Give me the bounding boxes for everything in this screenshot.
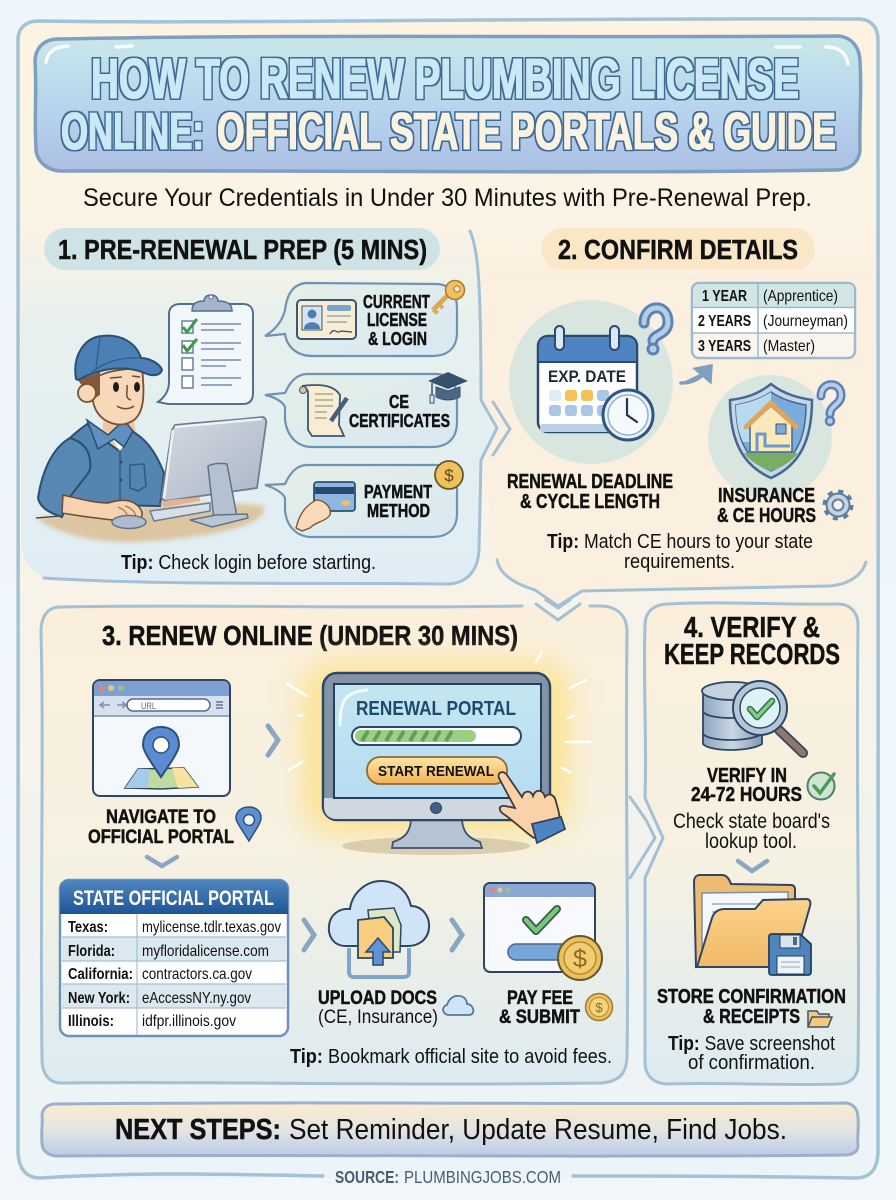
table row 2: 2 YEARS — [698, 313, 751, 330]
illustration: plumber at computer — [36, 336, 266, 542]
label: pay fee and submit — [499, 987, 580, 1028]
table row 1 — [702, 288, 838, 305]
icon: shield with house — [708, 375, 832, 499]
source line — [335, 1167, 561, 1187]
label: pay fee and submit: & SUBMIT — [499, 1006, 580, 1028]
icon: browser with check and coin: $ — [573, 945, 587, 973]
table row 1: 1 YEAR — [702, 288, 747, 305]
row: Florida — [68, 943, 269, 960]
row: Florida: Florida: — [68, 943, 115, 960]
label: verify in 24-72 hours: 24-72 HOURS — [691, 783, 802, 806]
icon: small map pin — [236, 807, 261, 841]
bubble text 1 — [363, 292, 430, 349]
tip 4 — [668, 1032, 835, 1074]
label: verify in 24-72 hours — [691, 764, 802, 806]
label: upload docs — [318, 987, 438, 1028]
chevron right — [452, 920, 462, 950]
tip 2: requirements. — [624, 550, 735, 573]
next steps list: Set Reminder, Update Resume, Find Jobs. — [289, 1114, 787, 1146]
label: store confirmation: STORE CONFIRMATION — [657, 986, 846, 1008]
icon: check badge — [808, 772, 834, 800]
label: upload docs: (CE, Insurance) — [318, 1006, 438, 1028]
icon: folder and floppy disk — [694, 875, 811, 975]
next steps banner — [42, 1103, 858, 1156]
bubble text 3: PAYMENT — [364, 482, 432, 502]
bubble text 2: CERTIFICATES — [349, 411, 450, 431]
label: insurance and CE hours: INSURANCE — [718, 485, 815, 507]
tip 2: Tip: Match CE hours to your state — [547, 530, 813, 553]
row: California: California: — [68, 966, 133, 983]
row: Illinois: idfpr.illinois.gov — [142, 1013, 236, 1030]
panel 4: verify and keep records — [630, 603, 859, 1085]
row: Texas: Texas: — [68, 919, 108, 936]
table row 2 — [698, 313, 848, 330]
row: California: contractors.ca.gov — [142, 966, 252, 983]
icon: cloud upload — [329, 881, 429, 977]
row: Texas: mylicense.tdlr.texas.gov — [142, 919, 281, 936]
panel 2: confirm details — [480, 224, 876, 606]
source line: PLUMBINGJOBS.COM — [404, 1167, 561, 1187]
label: store confirmation — [657, 986, 846, 1028]
label: verify in 24-72 hours: VERIFY IN — [707, 764, 787, 787]
icon: graduation cap — [428, 372, 468, 403]
icon: dollar coin — [435, 461, 463, 489]
calendar label: EXP. DATE — [548, 367, 626, 386]
icon: calendar with clock — [509, 300, 673, 464]
heading 3: 3. RENEW ONLINE (UNDER 30 MINS) — [102, 620, 518, 651]
chevron right — [268, 726, 278, 755]
icon: key — [433, 280, 464, 313]
row: California — [68, 966, 252, 983]
bubble text 1: LICENSE — [367, 310, 427, 330]
chevron right — [304, 920, 314, 950]
icon: gear — [824, 492, 852, 518]
icon: question mark — [644, 308, 668, 354]
text: check state board: lookup tool. — [705, 830, 797, 853]
panel 3: renew online — [41, 600, 628, 1084]
row: Illinois — [68, 1013, 236, 1030]
icon: browser with check and coin — [484, 883, 602, 980]
row: Florida: myfloridalicense.com — [142, 943, 269, 960]
tip 3: Tip: Bookmark official site to avoid fees. — [290, 1045, 612, 1068]
icon: small folder — [808, 1011, 832, 1027]
next steps bold: NEXT STEPS: — [115, 1114, 281, 1146]
bubble text 1: & LOGIN — [368, 329, 427, 349]
pill heading 1 — [44, 228, 440, 270]
row: New York: eAccessNY.ny.gov — [142, 990, 251, 1007]
subtitle: Secure Your Credentials in Under 30 Minutes with Pre-Renewal Prep. — [83, 184, 812, 212]
url label: URL — [141, 701, 156, 711]
heading 4: KEEP RECORDS — [664, 639, 840, 671]
label: navigate to official portal: OFFICIAL PORTAL — [88, 827, 234, 848]
chevron down — [738, 861, 767, 871]
icon: small cloud — [443, 996, 473, 1015]
label: store confirmation: & RECEIPTS — [703, 1006, 800, 1028]
tip 1: Tip: Check login before starting. — [121, 551, 376, 574]
bubble text 2: CE — [389, 392, 409, 412]
table row 3 — [698, 338, 815, 355]
label: upload docs: UPLOAD DOCS — [318, 987, 437, 1009]
chevron down — [147, 857, 177, 866]
panel 1: pre-renewal prep — [21, 226, 510, 584]
icon: scroll and pen — [300, 385, 347, 436]
bubble: payment method — [265, 461, 463, 537]
table row 3: 3 YEARS — [698, 338, 751, 355]
table row 2: (Journeyman) — [763, 313, 848, 330]
label: insurance and CE hours — [717, 485, 816, 527]
table row 3: (Master) — [763, 338, 815, 355]
icon: database with magnifier — [702, 681, 803, 753]
row: Texas — [68, 919, 281, 936]
title line 2 blue: ONLINE: — [61, 103, 204, 161]
icon: dollar coin: $ — [444, 466, 454, 485]
icon: question mark small — [821, 385, 841, 425]
icon: clipboard checklist — [158, 295, 253, 404]
icon: credit card in hand — [296, 482, 355, 531]
tip 4: of confirmation. — [688, 1051, 815, 1074]
table header: STATE OFFICIAL PORTAL — [73, 887, 274, 910]
heading 4 — [664, 612, 840, 671]
tip 4: Tip: Save screenshot — [668, 1032, 835, 1055]
row: Illinois: Illinois: — [68, 1013, 114, 1030]
heading 4: 4. VERIFY & — [684, 612, 820, 644]
cycle length table — [692, 283, 855, 358]
label: pay fee and submit: PAY FEE — [507, 987, 573, 1009]
title banner — [35, 36, 861, 172]
bubble text 1: CURRENT — [363, 292, 430, 312]
icon: license card — [297, 300, 356, 339]
icon: small coin — [586, 994, 612, 1020]
bubble: CE certificates — [265, 372, 468, 447]
button label: START RENEWAL — [378, 763, 494, 780]
text: check state board: Check state board's — [673, 810, 830, 833]
row: New York: New York: — [68, 990, 130, 1007]
tip 2 — [547, 530, 813, 573]
bubble text 3: METHOD — [367, 501, 430, 521]
pill heading 2: 2. CONFIRM DETAILS — [558, 234, 798, 265]
label: navigate to official portal — [88, 807, 234, 848]
table: state official portal — [60, 880, 288, 1036]
icon: browser with map pin — [93, 680, 230, 796]
text: check state board — [673, 810, 830, 853]
pill heading 2 — [541, 228, 815, 270]
arrow to table — [681, 366, 711, 383]
label: insurance and CE hours: & CE HOURS — [717, 505, 816, 527]
label: renewal deadline: & CYCLE LENGTH — [520, 491, 660, 513]
label: renewal deadline — [507, 471, 673, 513]
bubble text 2 — [349, 392, 450, 431]
bubble: current license and login — [265, 280, 464, 356]
row: New York — [68, 990, 251, 1007]
bubble text 3 — [364, 482, 432, 521]
illustration: renewal portal monitor — [287, 652, 590, 855]
pill heading 1: 1. PRE-RENEWAL PREP (5 MINS) — [58, 234, 427, 265]
portal heading: RENEWAL PORTAL — [356, 698, 516, 720]
table row 1: (Apprentice) — [763, 288, 838, 305]
icon: small coin: $ — [595, 1000, 603, 1015]
label: navigate to official portal: NAVIGATE TO — [106, 807, 216, 828]
label: renewal deadline: RENEWAL DEADLINE — [507, 471, 673, 493]
source line: SOURCE: — [335, 1167, 399, 1187]
